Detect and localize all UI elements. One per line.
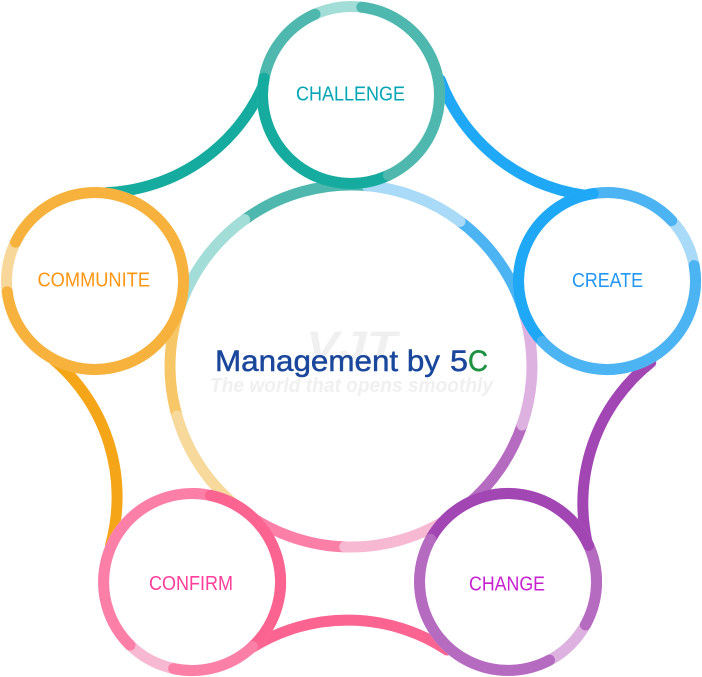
node: confirm xyxy=(104,494,281,671)
connector: create to change xyxy=(562,353,651,547)
title: Management by 5C: Management by xyxy=(215,345,440,378)
connector: confirm to communite xyxy=(51,351,139,545)
label: create: CREATE xyxy=(572,270,643,292)
label: communite: COMMUNITE xyxy=(38,270,150,292)
connector: change to confirm xyxy=(253,620,447,650)
connector: challenge to create xyxy=(423,80,597,218)
watermark: VJT xyxy=(306,324,401,368)
connector: communite to challenge xyxy=(106,79,281,217)
label: confirm: CONFIRM xyxy=(149,573,233,595)
node: communite xyxy=(6,192,184,370)
label: change: CHANGE xyxy=(469,574,545,596)
title: Management by 5C: C xyxy=(468,345,488,378)
watermark: The world that opens smoothly xyxy=(210,375,494,397)
watermark xyxy=(210,324,494,397)
node: create xyxy=(518,192,696,370)
node: challenge xyxy=(262,6,440,184)
title: Management by 5C: 5 xyxy=(450,345,468,378)
central ring xyxy=(170,185,532,547)
node: change xyxy=(420,493,597,670)
label: challenge: CHALLENGE xyxy=(296,84,405,106)
